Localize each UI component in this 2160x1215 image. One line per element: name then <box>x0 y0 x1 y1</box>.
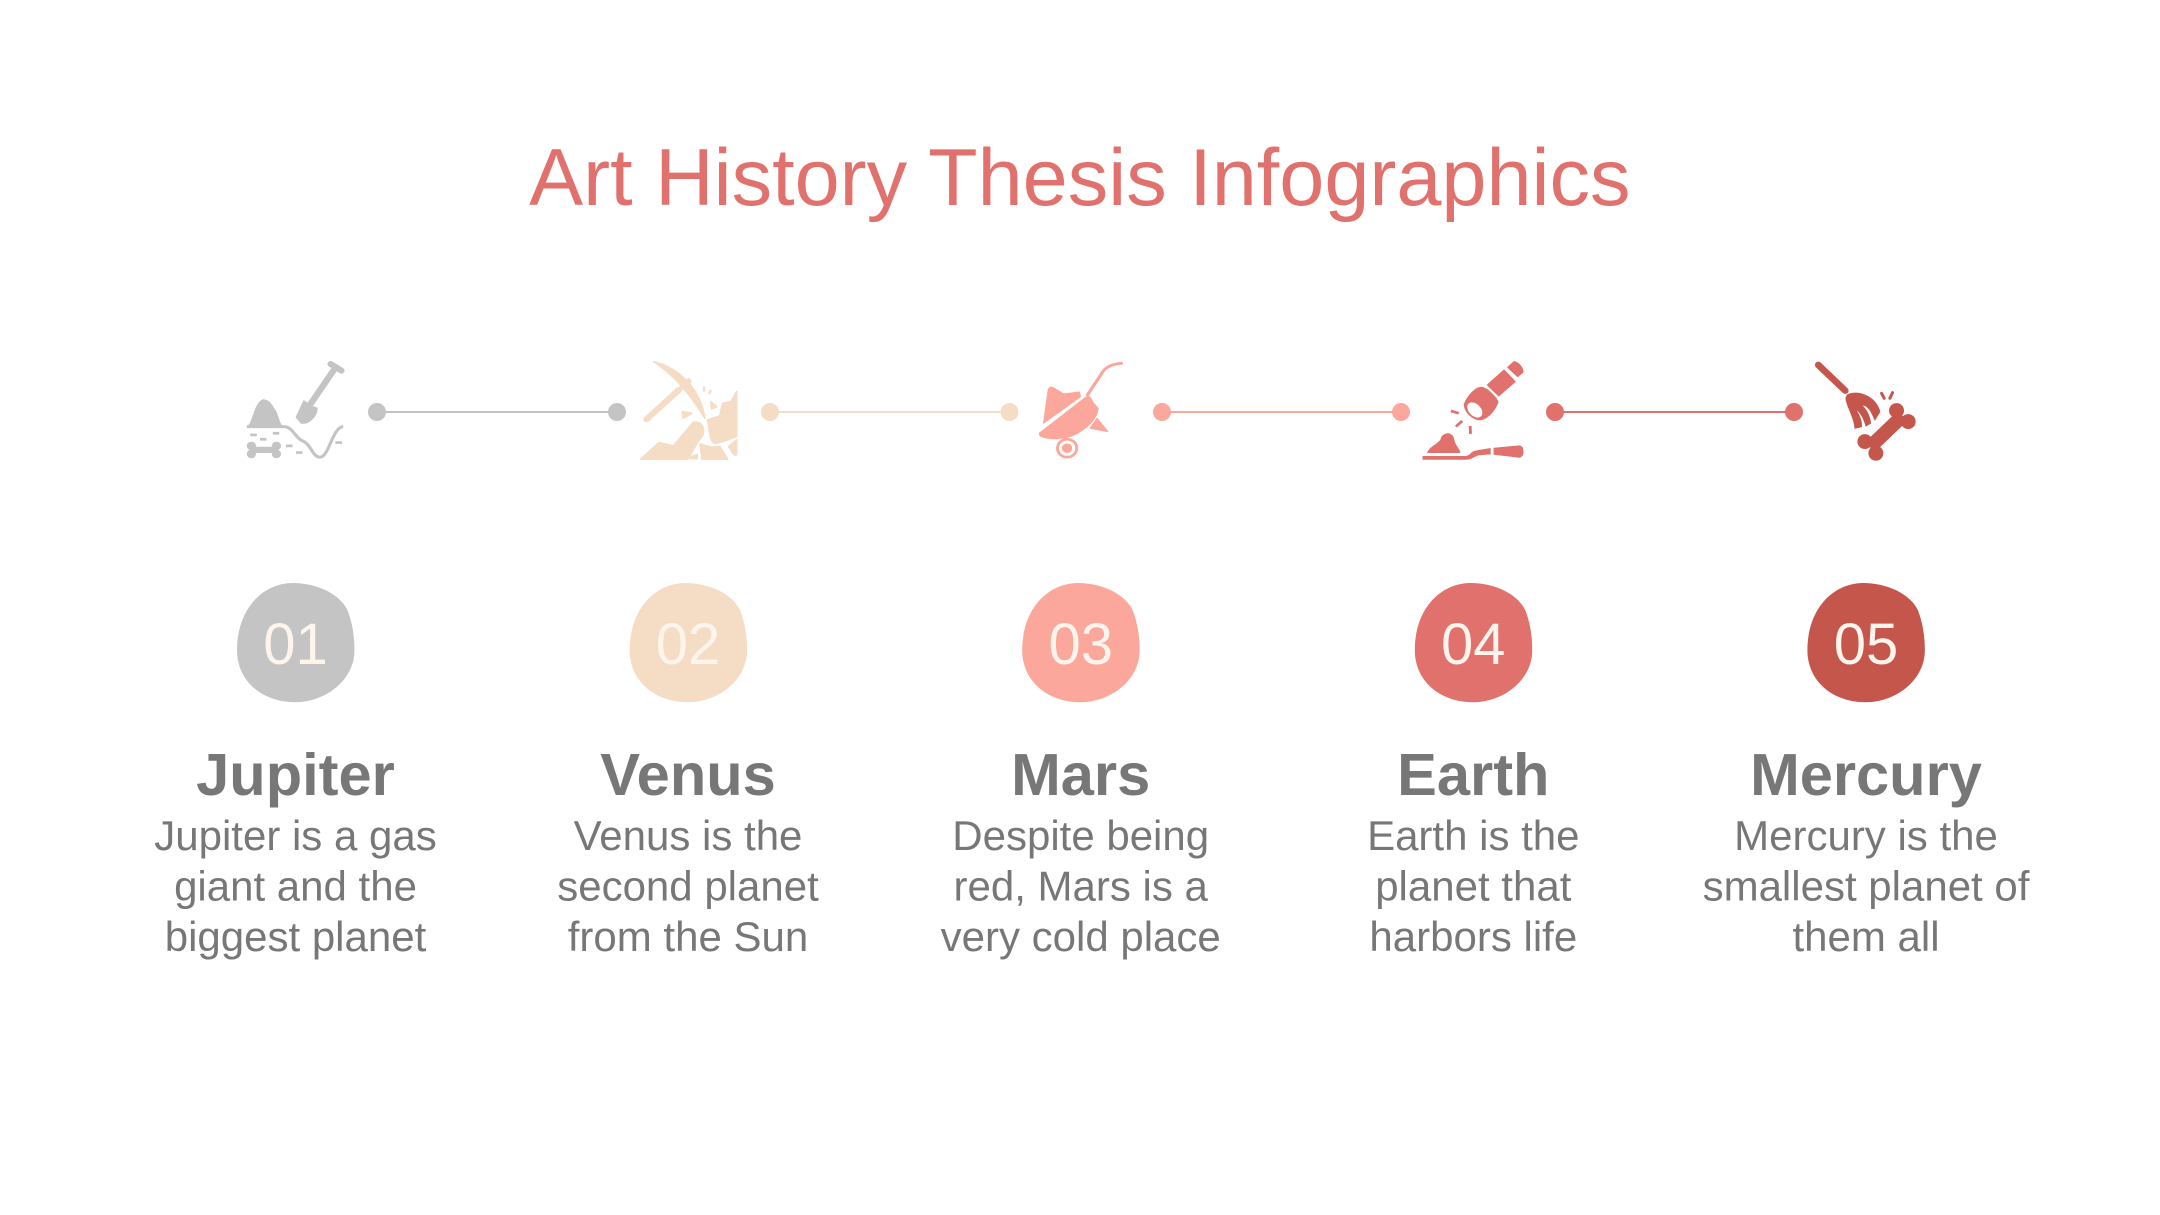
panel: Earth <box>1367 583 1580 960</box>
connector 2 <box>761 403 1018 421</box>
description: Mars: Despite being <box>952 812 1209 859</box>
description: Earth: harbors life <box>1369 913 1577 960</box>
description: Mars: red, Mars is a <box>953 862 1209 910</box>
description: Jupiter: Jupiter is a gas <box>154 812 437 859</box>
number badge 03: 03 <box>1048 612 1113 677</box>
connector 4 <box>1546 403 1803 421</box>
number badge 03 <box>1022 583 1140 702</box>
number badge 02: 02 <box>656 612 720 677</box>
icon: pickaxe and rock <box>641 362 737 459</box>
description: Venus: from the Sun <box>568 913 808 960</box>
panel: Jupiter <box>154 583 437 960</box>
description: Jupiter: giant and the <box>174 862 417 910</box>
description: Mercury: smallest planet of <box>1703 862 2030 910</box>
number badge 04: 04 <box>1441 612 1506 677</box>
description: Mars: very cold place <box>941 913 1221 960</box>
connector 1 <box>368 403 626 421</box>
panel: Mercury <box>1703 583 2030 960</box>
description: Mercury: them all <box>1792 913 1940 960</box>
description: Venus: second planet <box>557 862 819 910</box>
heading: Mars: Mars <box>1011 741 1150 808</box>
icon: shovel and dig site <box>247 364 343 458</box>
icon: wheelbarrow <box>1039 363 1121 457</box>
title: Art History Thesis Infographics <box>529 133 1631 223</box>
description: Mercury: Mercury is the <box>1734 812 1998 859</box>
number badge 05 <box>1807 583 1925 702</box>
description: Earth: planet that <box>1375 862 1572 910</box>
description: Earth: Earth is the <box>1367 812 1580 859</box>
number badge 01: 01 <box>263 612 328 677</box>
description: Jupiter: biggest planet <box>165 913 427 960</box>
heading: Jupiter: Jupiter <box>196 741 395 808</box>
connector 3 <box>1153 403 1410 421</box>
number badge 05: 05 <box>1834 612 1898 677</box>
icon: flashlight and trowel <box>1423 362 1523 459</box>
panel: Mars <box>941 583 1221 960</box>
heading: Earth: Earth <box>1397 741 1549 808</box>
number badge 04 <box>1415 583 1532 702</box>
panel: Venus <box>557 583 819 960</box>
description: Venus: Venus is the <box>574 812 802 859</box>
heading: Venus: Venus <box>600 741 776 808</box>
number badge 02 <box>630 583 747 702</box>
heading: Mercury: Mercury <box>1750 741 1982 808</box>
icon: brush and bone <box>1818 365 1915 460</box>
number badge 01 <box>237 583 354 702</box>
